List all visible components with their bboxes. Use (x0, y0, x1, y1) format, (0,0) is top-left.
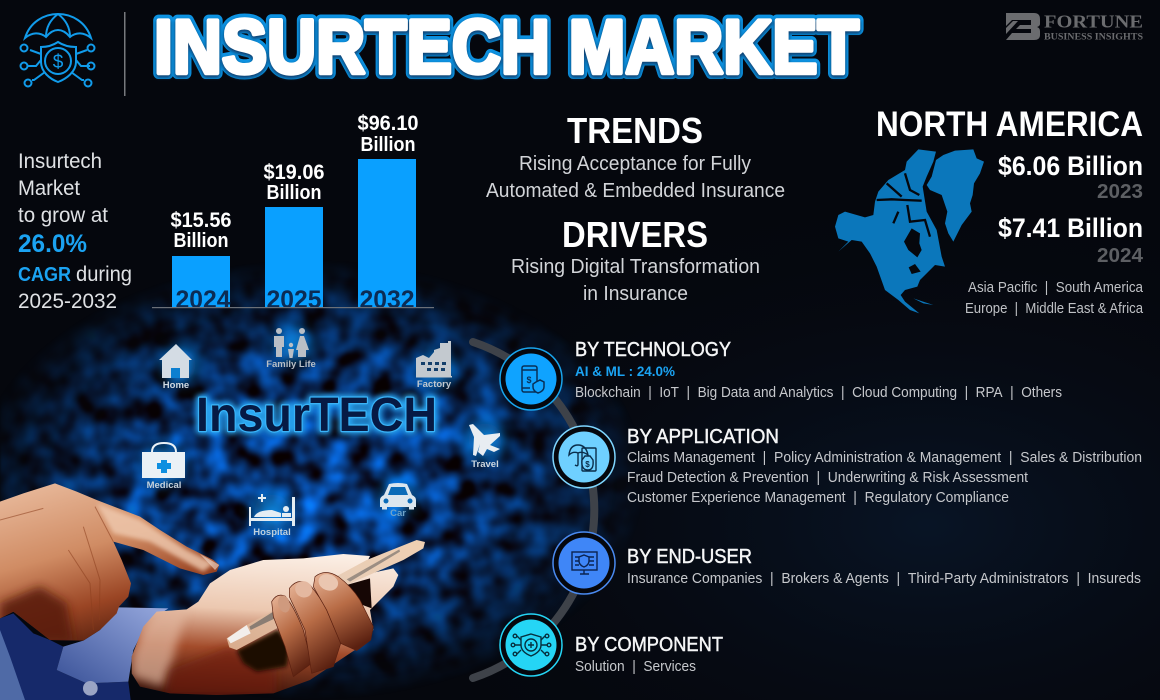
bar 2024: $15.56 (170, 209, 232, 232)
logo: Fortune Business Insights: BUSINESS INSIGHTS (1044, 32, 1143, 42)
icon: car: Car (390, 508, 406, 519)
icon: monitor shield (553, 532, 615, 594)
icon: travel plane (469, 424, 500, 470)
text: by technology: BY TECHNOLOGY (575, 339, 731, 361)
text: North America: 2023 (1097, 181, 1143, 203)
bar 2032: 2032 (360, 286, 414, 314)
title: INSURTECH MARKET (154, 5, 859, 90)
icon: medical: Medical (147, 480, 181, 491)
text: trends: Automated & Embedded Insurance (486, 180, 785, 202)
icon: circuit shield (500, 614, 562, 676)
text: North America: Europe | Middle East & Africa (965, 301, 1144, 317)
icon: factory: Factory (417, 379, 452, 390)
bar 2024: 2024 (176, 286, 231, 314)
icon: phone shield (500, 348, 562, 410)
phone shadow (237, 629, 290, 672)
text: CAGR statement: 2025-2032 (18, 290, 117, 313)
text: CAGR statement: CAGR (18, 264, 71, 286)
arc connector (473, 342, 594, 678)
text: CAGR statement (18, 150, 132, 313)
text: CAGR statement: Market (18, 177, 80, 200)
text: by component (575, 634, 723, 675)
illustration: holding hand with phone (132, 540, 425, 697)
bar 2025: 2025 (266, 286, 322, 314)
text: by end-user: BY END-USER (627, 546, 752, 568)
heading: InsurTECH: InsurTECH (196, 389, 437, 442)
fingers (272, 595, 312, 677)
segment: by application (553, 426, 1142, 506)
text: North America: 2024 (1097, 245, 1144, 267)
text: CAGR statement: to grow at (18, 204, 108, 227)
text: North America: Asia Pacific | South America (968, 280, 1144, 296)
text: by technology: AI & ML : 24.0% (575, 363, 676, 379)
segment: by technology (500, 339, 1062, 410)
text: North America: $6.06 Billion (998, 151, 1143, 181)
text: drivers: DRIVERS (562, 214, 708, 255)
icon: home (159, 344, 192, 391)
text: drivers: in Insurance (583, 283, 688, 305)
segment: by end-user (553, 532, 1141, 594)
map: North America (835, 149, 984, 313)
bar 2024: Billion (174, 230, 228, 252)
icon: hospital bed: Hospital (253, 527, 291, 538)
text: by end-user (627, 546, 1141, 587)
phone (347, 578, 372, 608)
icon: umbrella shield logo: $ (53, 52, 64, 73)
text: by application: Claims Management | Policy Administration & Management | Sales & Distribution (627, 450, 1142, 466)
icon: car (380, 483, 416, 519)
text: by application: Customer Experience Management | Regulatory Compliance (627, 490, 1009, 506)
logo: Fortune Business Insights: FORTUNE (1044, 12, 1143, 32)
heading: InsurTECH: InsurTECH (196, 389, 437, 442)
icon: umbrella money bag (553, 426, 615, 488)
icon: factory (416, 341, 452, 390)
icon: home: Home (163, 380, 189, 391)
text: trends: Rising Acceptance for Fully (519, 153, 751, 175)
background: blue textured network glow (0, 250, 660, 700)
text: by end-user: Insurance Companies | Brokers & Agents | Third-Party Administrators | Insureds (627, 571, 1141, 587)
icon: umbrella shield logo (20, 14, 94, 86)
icon: phone shield: $ (526, 375, 532, 385)
text: CAGR statement: 26.0% (18, 230, 87, 258)
text: CAGR statement: during (76, 263, 132, 286)
text: by application: BY APPLICATION (627, 426, 779, 448)
text: trends: TRENDS (567, 110, 703, 151)
bar 2032: $96.10 (358, 112, 418, 135)
icon: medical (142, 443, 185, 491)
text: by component: BY COMPONENT (575, 634, 723, 656)
bar 2025: $19.06 (264, 161, 324, 184)
title: INSURTECH MARKET (154, 5, 859, 90)
icon: family life (266, 328, 316, 370)
text: North America (876, 105, 1144, 317)
header divider (124, 12, 126, 96)
text: North America: $7.41 Billion (998, 213, 1143, 243)
icon: family life: Family Life (266, 359, 316, 370)
heading: InsurTECH: InsurTECH (196, 389, 437, 442)
icon: travel plane: Travel (471, 459, 499, 470)
illustration: pointing hand (0, 483, 219, 643)
text: by technology: Blockchain | IoT | Big Data and Analytics | Cloud Computing | RPA | Others (575, 385, 1062, 401)
illustration: floating insurance icons (142, 328, 502, 538)
text: by application (627, 426, 1142, 506)
text: trends (486, 110, 785, 202)
text: by technology (575, 339, 1062, 401)
illustration: shirt sleeve (0, 607, 168, 700)
bar 2032 (358, 112, 418, 314)
bar 2032: Billion (360, 134, 416, 156)
bar 2024 (170, 209, 232, 314)
bar 2025: Billion (266, 182, 322, 204)
bar chart: market size (152, 112, 434, 314)
segment: by component (500, 614, 723, 676)
text: drivers: Rising Digital Transformation (511, 256, 760, 278)
icon: umbrella money bag: $ (585, 460, 590, 469)
bar 2025 (264, 161, 324, 314)
logo: Fortune Business Insights (1006, 12, 1143, 42)
text: drivers (511, 214, 760, 305)
text: CAGR statement: Insurtech (18, 150, 102, 173)
text: by application: Fraud Detection & Prevention | Underwriting & Risk Assessment (627, 470, 1028, 486)
title: INSURTECH MARKET (154, 7, 859, 92)
icon: hospital bed (249, 494, 295, 538)
text: by component: Solution | Services (575, 659, 696, 675)
